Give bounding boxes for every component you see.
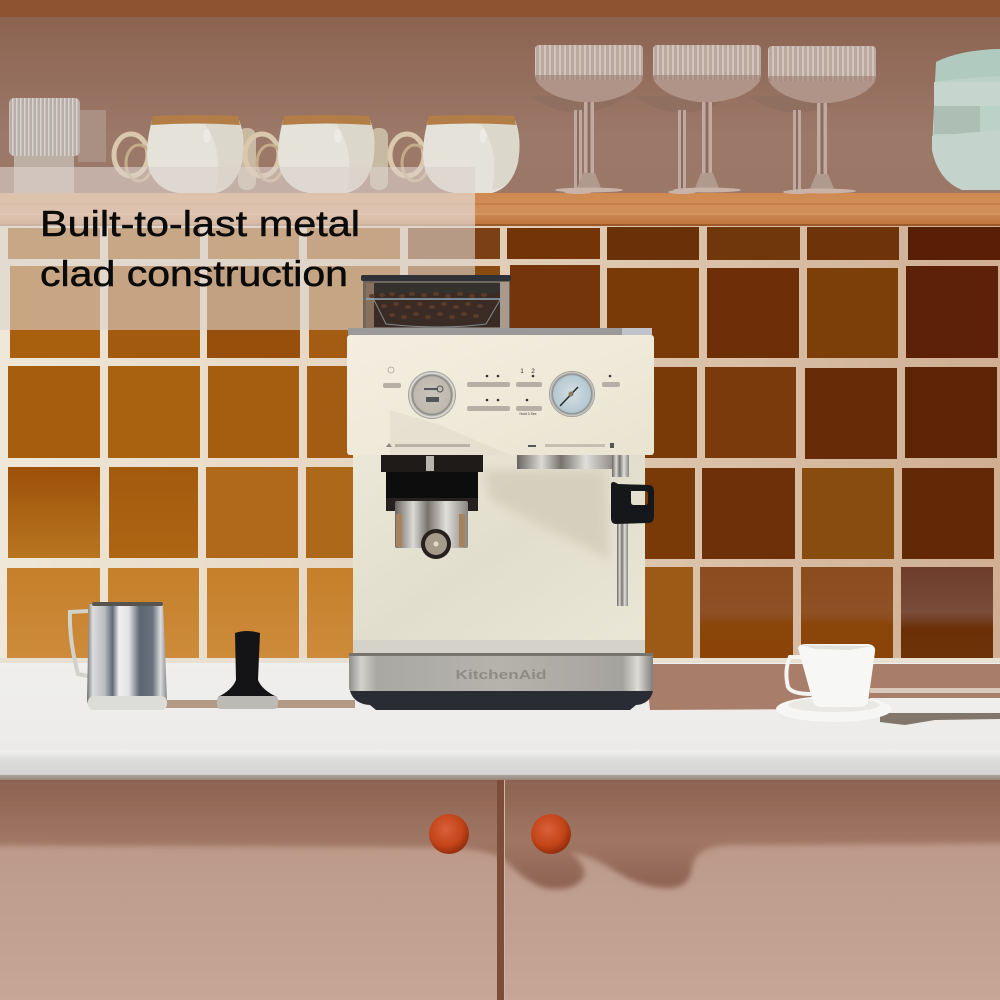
- lower body shadow: [483, 470, 610, 560]
- espresso machine: [347, 275, 654, 710]
- coffee beans: [369, 292, 487, 319]
- machine lower body: [353, 450, 645, 650]
- steel base with logo: [349, 653, 653, 692]
- caption overlay panel: [0, 167, 475, 330]
- group head: [381, 455, 483, 502]
- bean hopper: [361, 275, 511, 329]
- cabinet knob left: [429, 814, 469, 854]
- caption text: [40, 203, 360, 294]
- mugs: [114, 115, 519, 193]
- coupe glasses: [530, 45, 876, 194]
- indicator dots and labels: [486, 368, 611, 416]
- base cover: [353, 640, 645, 654]
- stacked green bowls: [932, 49, 1000, 190]
- indicator dots and labels: Hold 3 Sec: [519, 412, 537, 416]
- milk pitcher: [70, 602, 167, 710]
- pressure gauge: [549, 371, 595, 417]
- indicator dots and labels: 1: [520, 368, 524, 375]
- caption text: clad construction: [40, 253, 348, 294]
- caption text: Built-to-last metal: [40, 203, 360, 244]
- steam wand: [612, 455, 629, 606]
- tile backsplash: [0, 226, 1000, 662]
- power button: [383, 383, 401, 388]
- selector dial: [408, 371, 456, 419]
- scale markings: [386, 443, 614, 448]
- reflected shadow band: [645, 664, 1000, 712]
- steam wand handle: [611, 482, 654, 524]
- steam collar: [517, 455, 615, 469]
- countertop: [0, 658, 1000, 780]
- upper shelf underside: [0, 0, 1000, 17]
- knob and counter shadow: [0, 780, 1000, 889]
- espresso cup and saucer: [776, 644, 892, 722]
- indicator dots and labels: 2: [531, 368, 535, 375]
- coffee tamper: [217, 631, 278, 709]
- wall background: [0, 0, 1000, 226]
- dark base foot: [350, 691, 653, 710]
- wooden shelf: [0, 193, 1000, 226]
- function buttons: [467, 382, 620, 411]
- logo: KitchenAid: [456, 667, 547, 682]
- ribbed glass tumblers: [9, 98, 106, 193]
- machine top trim: [348, 328, 652, 335]
- portafilter: [386, 498, 478, 559]
- cabinet knob right: [531, 814, 571, 854]
- left tool shadow: [165, 700, 355, 708]
- control panel housing: [347, 335, 654, 455]
- cabinet doors: [0, 780, 1000, 1000]
